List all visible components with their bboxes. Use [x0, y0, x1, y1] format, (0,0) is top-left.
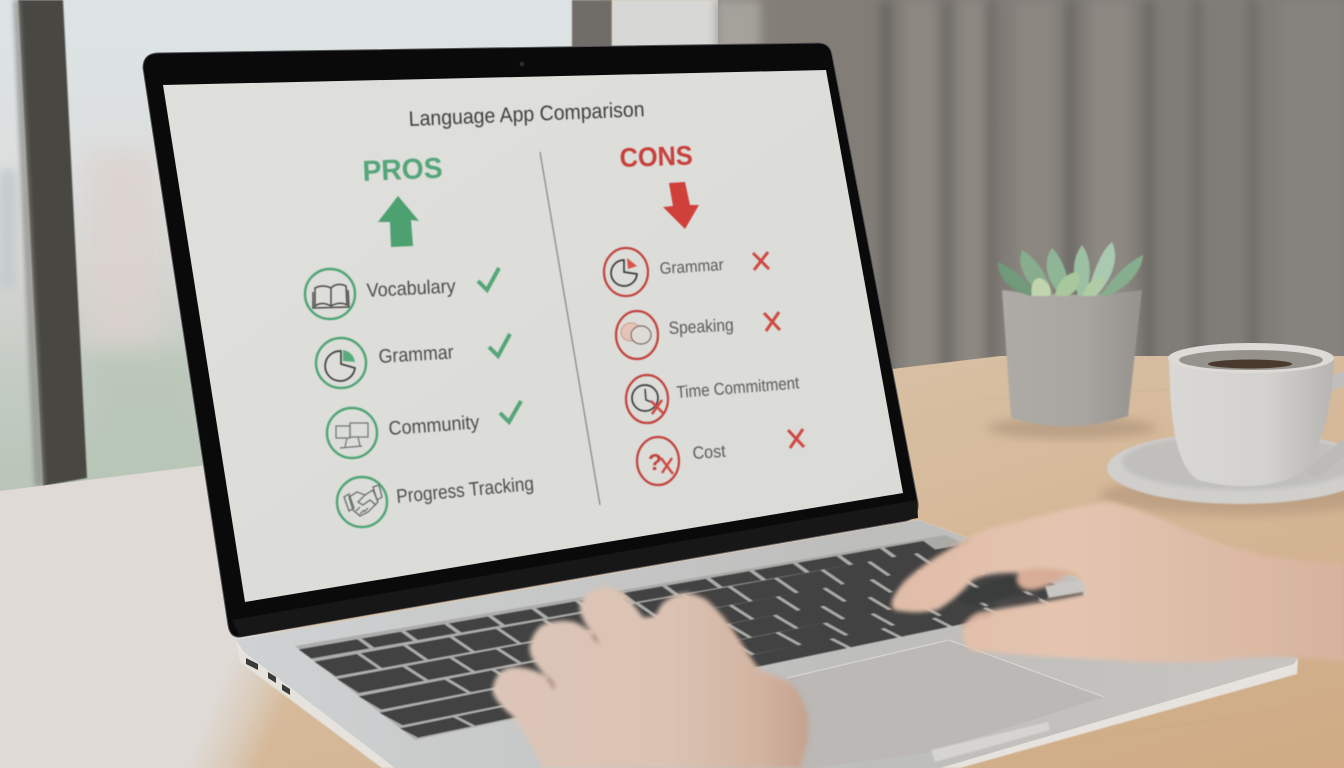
pros row: community: Community [388, 411, 480, 440]
curled finger [1017, 568, 1070, 590]
cup handle [1305, 371, 1344, 478]
cons row: cost: Cost [692, 441, 726, 463]
screen content [305, 98, 1344, 768]
ports [246, 658, 290, 695]
cons row: speaking: Speaking [668, 315, 734, 338]
left hand [492, 587, 809, 768]
screen lid bezel [143, 43, 918, 637]
cons row: grammar: Grammar [659, 256, 725, 278]
curtain [612, 0, 1344, 400]
icon: check [500, 401, 521, 422]
cup body [1169, 356, 1334, 486]
icon: monitors [336, 423, 368, 448]
cons row: cost [637, 429, 804, 485]
hinge [232, 500, 918, 637]
icon: pie chart [325, 350, 355, 381]
table [0, 356, 1344, 768]
far window post [572, 0, 612, 60]
camera [520, 62, 524, 66]
icon: pie chart [611, 258, 637, 286]
screen [163, 70, 903, 602]
cons row: grammar [604, 248, 769, 296]
panel: cons [604, 140, 804, 485]
icon: x mark [764, 312, 780, 331]
laptop base [236, 520, 1298, 768]
pros row: progress tracking: Progress Tracking [395, 473, 535, 508]
icon: x mark [753, 252, 769, 270]
cons heading: CONS [619, 140, 693, 173]
icon: open book [313, 284, 349, 308]
divider [540, 152, 600, 505]
pros row: grammar [316, 334, 510, 388]
saucer [1107, 432, 1344, 504]
cons row: time commitment [626, 373, 800, 423]
panel: pros [305, 153, 535, 527]
plant pot with succulent [987, 242, 1157, 439]
trackpad [787, 640, 1104, 768]
icon: clock with x [632, 385, 663, 414]
window frame post [18, 0, 87, 486]
keyboard [295, 535, 1084, 740]
pros row: vocabulary [305, 268, 499, 319]
icon: succulent [998, 242, 1143, 296]
coffee cup and saucer [1100, 343, 1344, 515]
pros row: grammar: Grammar [378, 341, 455, 368]
pros row: progress tracking [337, 473, 535, 527]
icon: red down arrow [663, 182, 699, 229]
icon: handshake [344, 485, 382, 516]
icon: x mark [788, 429, 804, 448]
hand shape [892, 502, 1344, 662]
title: Language App Comparison [408, 98, 645, 131]
icon: check [489, 334, 510, 356]
keys and gap seen through the hand [952, 576, 1095, 608]
icon: question mark with x [648, 449, 673, 475]
right hand [892, 502, 1344, 662]
cons row: time commitment: Time Commitment [676, 373, 800, 402]
window background [0, 0, 612, 500]
icon: speech bubbles [621, 323, 651, 344]
pros row: vocabulary: Vocabulary [366, 275, 456, 302]
icon: green up arrow [378, 196, 419, 247]
pros heading: PROS [362, 153, 443, 188]
icon: check [478, 268, 499, 290]
cons row: speaking [616, 311, 780, 359]
icon: question mark with x: ? [648, 449, 662, 475]
pros row: community [327, 401, 521, 458]
